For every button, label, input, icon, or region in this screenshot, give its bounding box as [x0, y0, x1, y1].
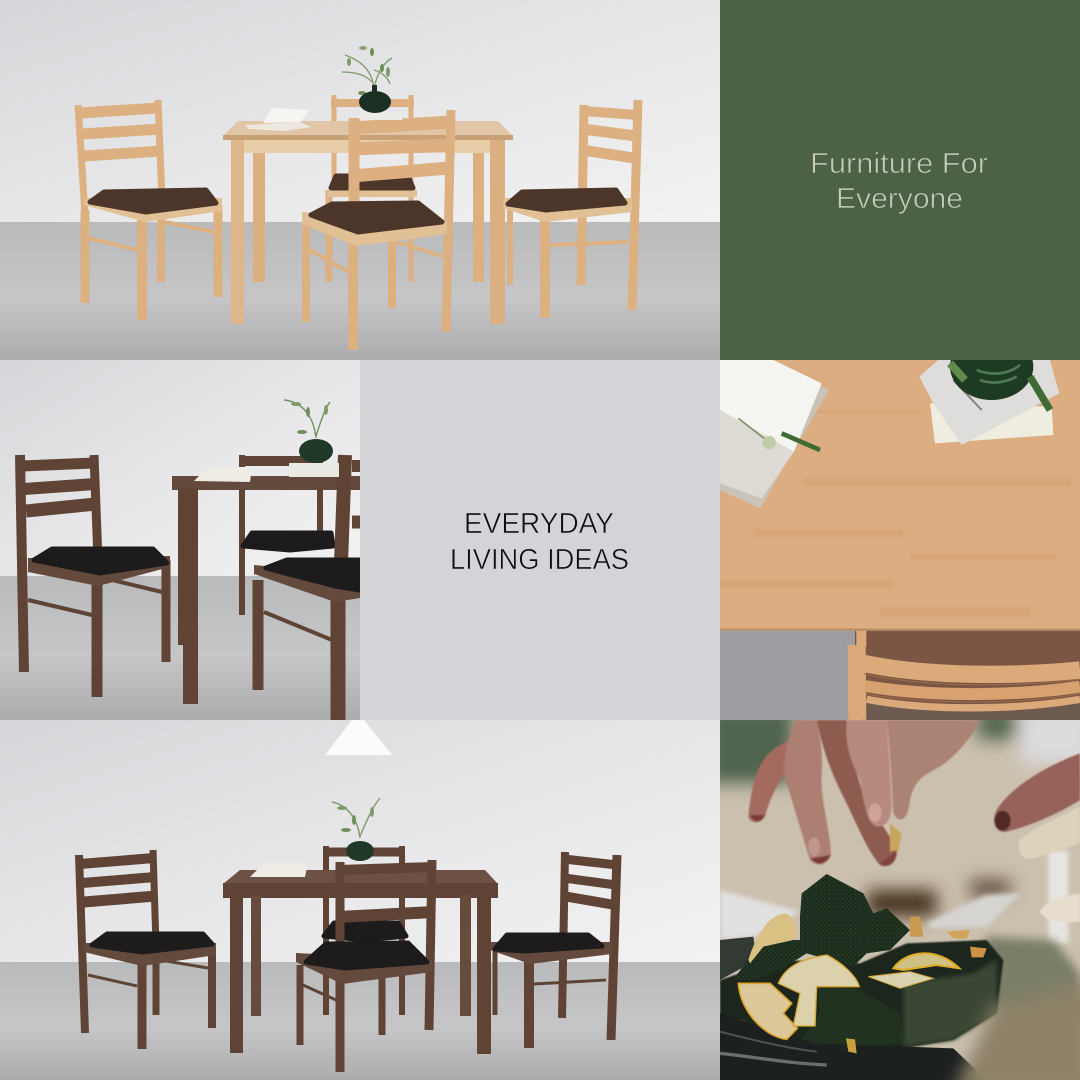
dark greens and pan [720, 874, 1080, 1080]
pendant lamp [325, 720, 392, 755]
vase and plant [284, 400, 339, 477]
panel: natural wood dining set photo [0, 0, 720, 360]
table edge and floor [720, 629, 1080, 631]
left chair [20, 455, 170, 697]
left hand [748, 720, 980, 866]
vase and plant [332, 798, 380, 861]
left chair [79, 850, 216, 1049]
open book [720, 360, 829, 508]
stacked books and vase [919, 360, 1060, 445]
front chair [296, 860, 434, 1072]
left chair [78, 100, 222, 320]
book [250, 863, 308, 877]
table [223, 121, 513, 324]
panel: walnut dining set photo with lamp [0, 720, 720, 1080]
heading: everyday living ideas: LIVING IDEAS [450, 544, 629, 576]
back chair [324, 846, 406, 1015]
wood grain [720, 410, 1072, 617]
front chair [254, 455, 360, 720]
back chair [327, 95, 417, 282]
heading: furniture for everyone [810, 148, 988, 215]
right chair [503, 100, 638, 318]
open book [245, 108, 312, 131]
blurred background [707, 707, 1080, 917]
lemon slices [738, 913, 987, 1053]
white plate and utensils [720, 850, 1068, 943]
heading: furniture for everyone: Everyone [836, 183, 963, 215]
back chair [240, 455, 333, 615]
front chair [302, 110, 451, 350]
panel: table top close-up photo [720, 333, 1080, 720]
panel: hands garnishing food photo [707, 707, 1080, 1080]
panel: everyday living ideas [360, 360, 720, 720]
panel: walnut chairs close-up photo [0, 360, 360, 720]
right chair [490, 852, 617, 1048]
panel: green title block [720, 0, 1080, 360]
book [194, 467, 252, 482]
chair back rail [857, 631, 1080, 720]
right hand [994, 753, 1080, 922]
heading: everyday living ideas: EVERYDAY [464, 508, 614, 540]
blurred foreground [953, 980, 1080, 1080]
table [172, 476, 360, 704]
heading: everyday living ideas [450, 508, 629, 576]
table [223, 870, 498, 1054]
heading: furniture for everyone: Furniture For [810, 148, 988, 180]
vase and plant [342, 46, 402, 120]
